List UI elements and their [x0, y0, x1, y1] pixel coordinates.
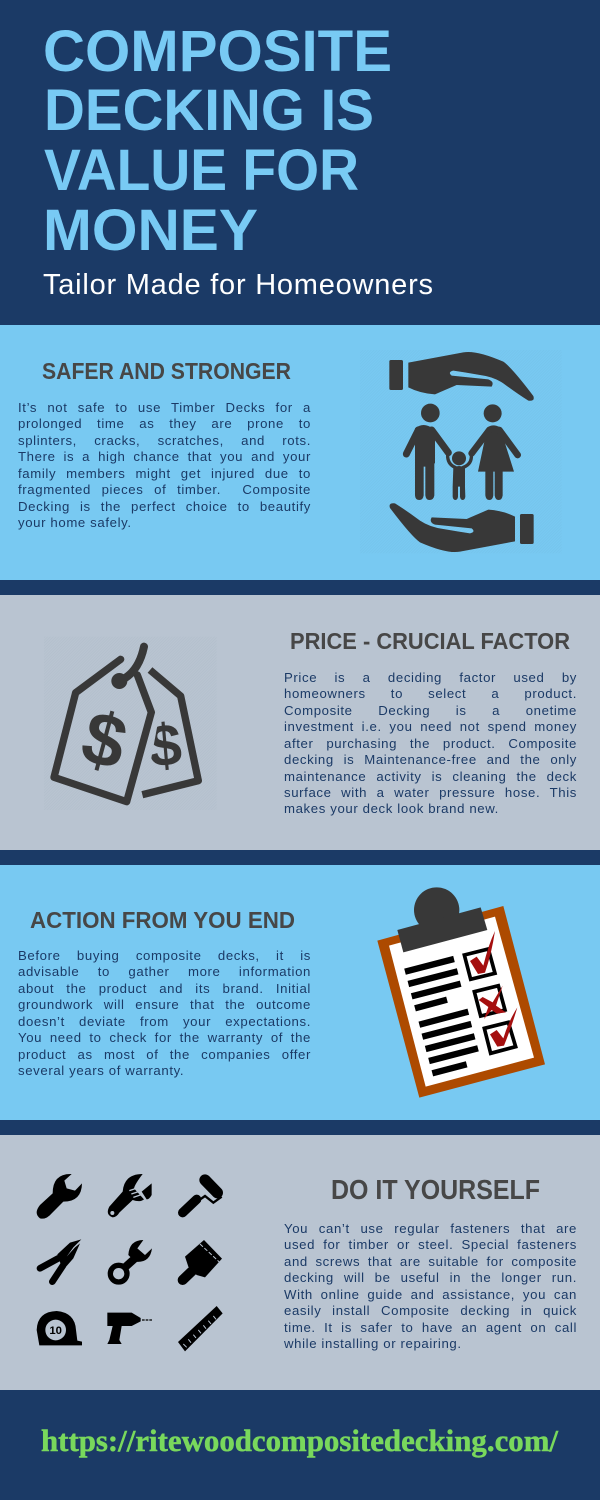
icon: clipboard checklist [377, 887, 545, 1098]
panel: action background [0, 865, 600, 1120]
text block: action body: You need to check for the warranty of the [18, 1030, 311, 1045]
text block: do it yourself body: and screws that are suitable for composite [284, 1254, 577, 1269]
panel: do it yourself background [0, 1135, 600, 1390]
text block: safer and stronger body: your home safely. [18, 515, 132, 530]
text block: safer and stronger body: splinters, cracks, scratches, and rots. [18, 433, 311, 448]
text block: price body: decking is Maintenance-free and the only [284, 752, 577, 767]
icon: price tags: $ [74, 694, 136, 786]
icon: paint roller [183, 1180, 222, 1213]
text block: safer and stronger body: There is a high chance that you and your [18, 449, 311, 464]
text block: do it yourself body: With online guide and assistance, you can [284, 1287, 577, 1302]
text block: safer and stronger body: fragmented pieces of timber. Composite [18, 482, 311, 497]
icon: price tags: $ [146, 710, 184, 780]
text block: do it yourself body: easily install Composite decking in quick [284, 1303, 577, 1318]
text block: action body: doesn’t deviate from your expectations. [18, 1014, 311, 1029]
icon: ring spanner [110, 1240, 152, 1282]
panel: safer and stronger background [0, 325, 600, 580]
icons: tool set [37, 1174, 223, 1351]
title: MONEY [43, 198, 258, 263]
icon: tape measure: 10 [49, 1325, 62, 1337]
text block: do it yourself body: used for timber or steel. Special fasteners [284, 1237, 577, 1252]
text block: action body: advisable to gather more information [18, 964, 311, 979]
icon: power drill [107, 1313, 153, 1344]
text block: price body: maintenance activity is cleaning the deck [284, 769, 577, 784]
text block: price body: makes your deck look brand new. [284, 801, 499, 816]
text block: do it yourself body: time. It is safer to have an agent on call [284, 1320, 577, 1335]
text block: action body: groundwork will ensure that the outcome [18, 997, 311, 1012]
icon: price tags [50, 642, 202, 806]
text block: price body [284, 670, 577, 816]
heading: price: PRICE - CRUCIAL FACTOR [290, 628, 570, 654]
icon: adjustable wrench [108, 1174, 152, 1217]
subtitle: Tailor Made for Homeowners [43, 269, 433, 301]
text block: do it yourself body [284, 1221, 577, 1351]
title [43, 19, 392, 263]
text block: do it yourself body: decking will be useful in the longer run. [284, 1270, 577, 1285]
title: COMPOSITE [43, 19, 392, 84]
icon: tape measure [37, 1311, 82, 1345]
text block: price body: surface with a water pressure hose. This [284, 785, 577, 800]
panel: price background [0, 595, 600, 850]
text block: safer and stronger body: prolonged time as they are prone to [18, 416, 311, 431]
text block: safer and stronger body [18, 400, 311, 530]
text block: price body: after purchasing the product. Composite [284, 736, 577, 751]
text block: action body: product as most of the companies offer [18, 1047, 311, 1062]
text block: action body: about the product and its brand. Initial [18, 981, 311, 996]
heading: action: ACTION FROM YOU END [30, 907, 295, 933]
icon: paint brush [183, 1240, 222, 1280]
text block: action body: several years of warranty. [18, 1063, 184, 1078]
icon: wrench [37, 1174, 82, 1219]
heading: safer and stronger: SAFER AND STRONGER [42, 358, 291, 384]
text block: action body: Before buying composite decks, it is [18, 948, 311, 963]
text block: do it yourself body: You can’t use regular fasteners that are [284, 1221, 577, 1236]
footer url: https://ritewoodcompositedecking.com/ [41, 1423, 558, 1458]
icon: pliers [40, 1239, 81, 1282]
icon: ruler [178, 1306, 223, 1351]
text block: price body: Composite Decking is a onetime [284, 703, 577, 718]
text block: action body [18, 948, 311, 1078]
heading: do it yourself: DO IT YOURSELF [331, 1174, 540, 1205]
text block: safer and stronger body: family members might get injured due to [18, 466, 311, 481]
title: DECKING IS [44, 78, 374, 143]
title: VALUE FOR [44, 138, 359, 203]
text block: do it yourself body: while installing or repairing. [284, 1336, 462, 1351]
icon: hands protecting family [360, 350, 562, 553]
text block: price body: homeowners to select a product. [284, 686, 577, 701]
text block: safer and stronger body: It’s not safe to use Timber Decks for a [18, 400, 311, 415]
text block: price body: investment i.e. you need not spend money [284, 719, 577, 734]
text block: safer and stronger body: Decking is the perfect choice to beautify [18, 499, 311, 514]
text block: price body: Price is a deciding factor used by [284, 670, 577, 685]
